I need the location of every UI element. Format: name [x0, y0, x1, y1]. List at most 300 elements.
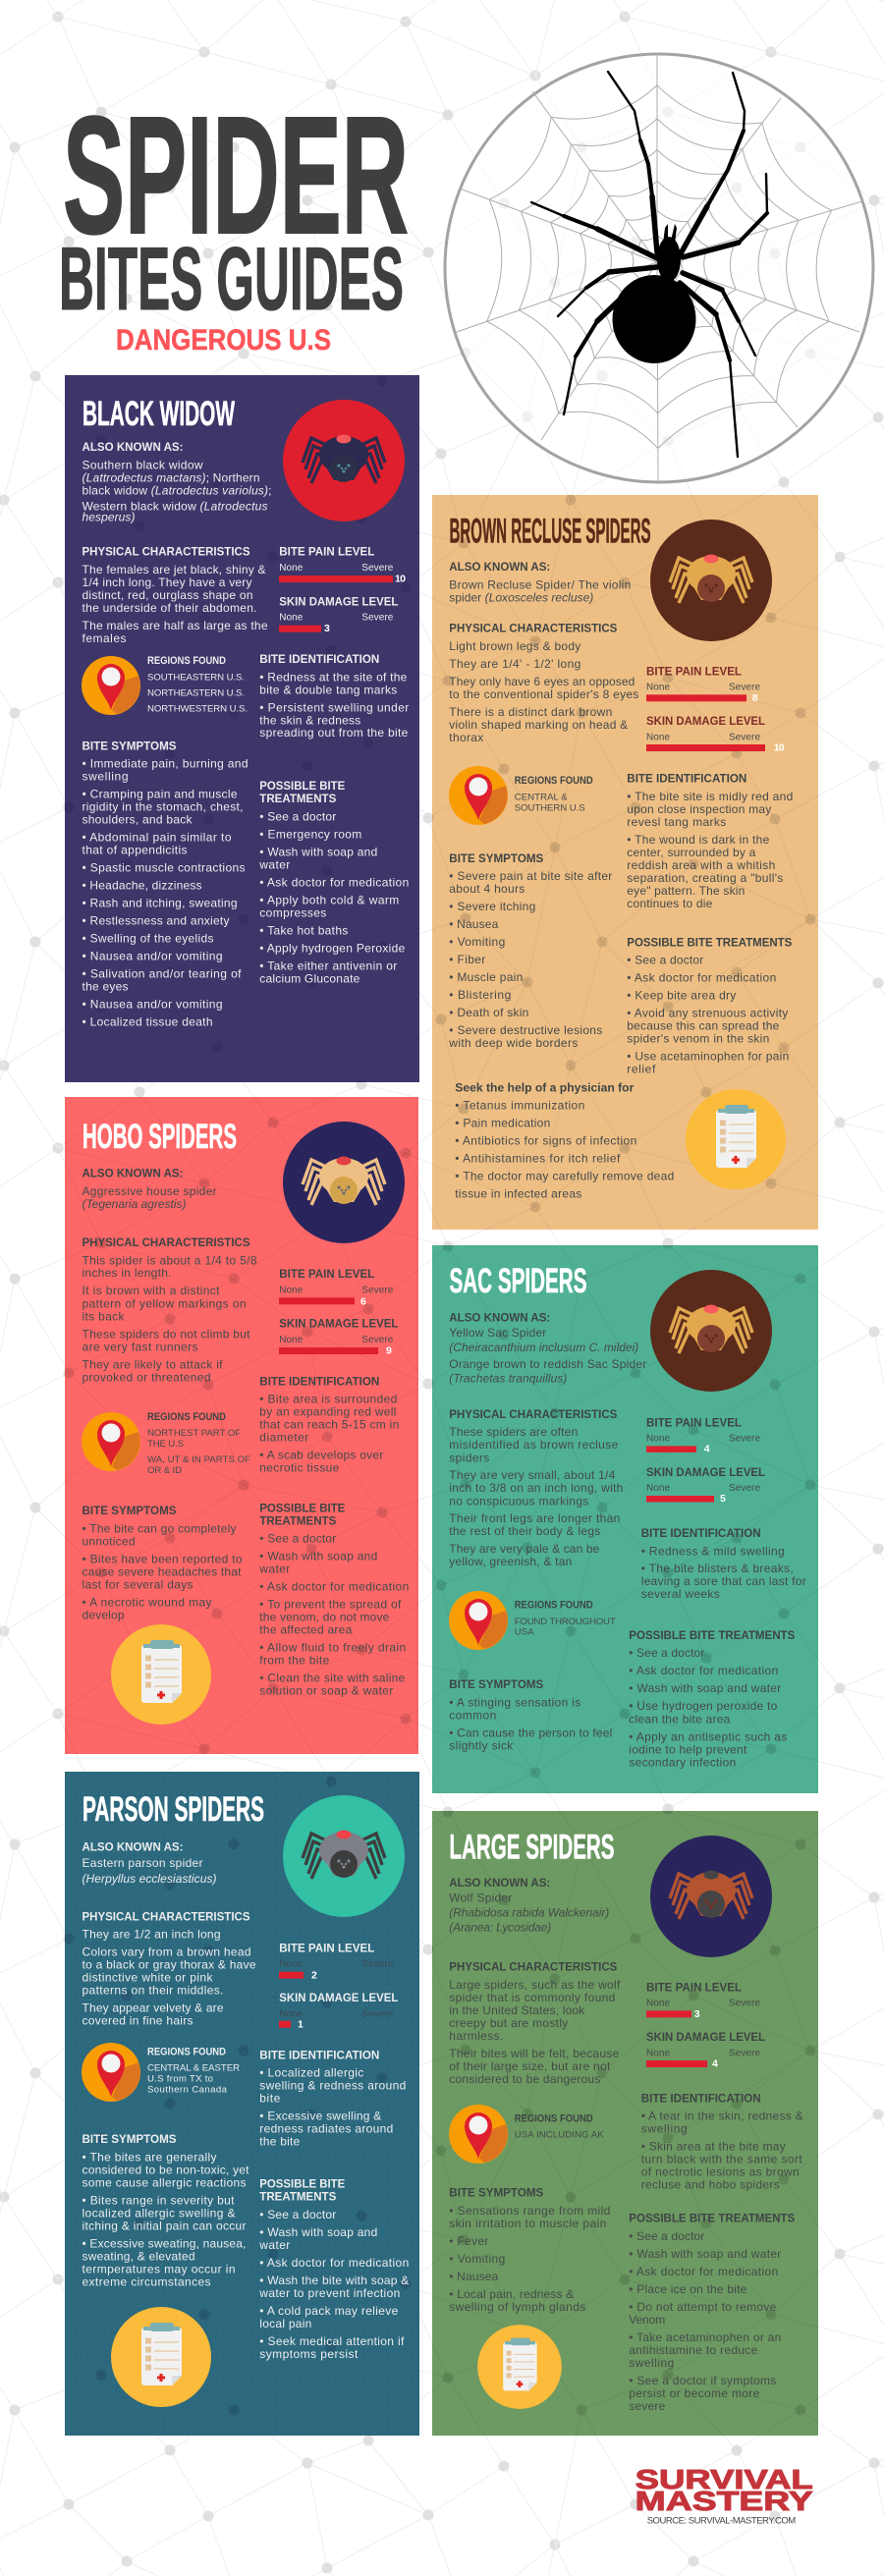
- text: bite identification: [627, 772, 793, 910]
- text: bite identification: • The bite site is midly red and: [627, 790, 793, 803]
- text: physical characteristics: PHYSICAL CHARACTERISTICS: [449, 622, 617, 635]
- chart: bite pain level 10: BITE PAIN LEVEL: [279, 545, 374, 559]
- text: regions found: REGIONS FOUND: [515, 2113, 593, 2125]
- chart: bite pain level 8: None: [646, 683, 670, 693]
- text: possible bite treatments: • Wash the bite with soap &: [259, 2274, 409, 2287]
- text: bite symptoms: • Nausea and/or vomiting: [83, 950, 222, 963]
- text: regions found: THE U.S: [147, 1439, 184, 1450]
- chart: skin damage level 9: Severe: [361, 1335, 394, 1345]
- text: possible bite treatments: water: [258, 1562, 290, 1576]
- text: possible bite treatments: calcium Gluconate: [259, 971, 360, 985]
- text: possible bite treatments: • Ask doctor for medication: [259, 875, 409, 889]
- text: possible bite treatments: • Wash with soap and: [259, 1550, 377, 1563]
- text: physical characteristics: spider that is commonly found: [449, 1991, 615, 2004]
- chart: bite pain level 10: 10: [395, 574, 406, 585]
- icon: location pin: [82, 1412, 140, 1471]
- text: physical characteristics: [83, 1909, 256, 2027]
- text: regions found: SOUTHEASTERN U.S.: [147, 673, 245, 684]
- text: physical characteristics: PHYSICAL CHARACTERISTICS: [83, 1235, 249, 1249]
- chart: bite pain level 2: [279, 1941, 394, 1981]
- text: possible bite treatments: POSSIBLE BITE TREATMENTS: [627, 936, 792, 950]
- chart: bite pain level 10: [279, 545, 406, 585]
- text: regions found: REGIONS FOUND: [147, 655, 226, 667]
- icon: hobo spider: [283, 1122, 405, 1243]
- text: bite symptoms: • Nausea: [449, 2270, 499, 2283]
- chart: bite pain level 2: Severe: [361, 1959, 394, 1970]
- text: bite symptoms: • A necrotic wound may: [83, 1595, 212, 1609]
- text: possible bite treatments: [258, 779, 409, 985]
- text: physical characteristics: covered in fine hairs: [83, 2013, 193, 2027]
- text: physical characteristics: the rest of their body & legs: [449, 1524, 600, 1538]
- logo: survival mastery: [635, 2464, 813, 2527]
- text: physical characteristics: PHYSICAL CHARACTERISTICS: [449, 1959, 617, 1973]
- chart: bite pain level 8: Severe: [729, 683, 760, 693]
- chart: bite pain level 6: BITE PAIN LEVEL: [279, 1267, 374, 1281]
- panel: hobo spiders: [65, 1097, 418, 1754]
- text: possible bite treatments: • Ask doctor for medication: [259, 2256, 409, 2270]
- text: bite symptoms: that of appendicitis: [83, 844, 187, 857]
- chart: bite pain level 4: BITE PAIN LEVEL: [646, 1415, 742, 1429]
- chart: skin damage level 1: 1: [298, 2018, 304, 2030]
- text: bite identification: [641, 1526, 806, 1601]
- text: bite identification: • Skin area at the bite may: [641, 2140, 786, 2154]
- logo: survival mastery: SOURCE: SURVIVAL-MASTERY.COM: [647, 2516, 796, 2527]
- text: bite symptoms: [83, 2132, 249, 2289]
- icon: location pin: [449, 1591, 508, 1650]
- text: bite identification: revesl tang marks: [627, 815, 726, 829]
- chart: skin damage level 10: None: [646, 732, 670, 742]
- text: bite identification: reddish area with a whitish: [627, 858, 775, 872]
- text: possible bite treatments: water: [258, 857, 290, 871]
- text: physical characteristics: [449, 1959, 621, 2086]
- text: bite identification: recluse and hobo spiders: [641, 2178, 780, 2192]
- icon: wolf spider: [650, 1836, 772, 1957]
- text: bite symptoms: termperatures may occur in: [83, 2263, 236, 2276]
- text: bite symptoms: • Vomiting: [449, 935, 505, 949]
- heading: parson spiders: PARSON SPIDERS: [83, 1790, 264, 1829]
- text: physical characteristics: The males are half as large as the: [83, 619, 268, 632]
- text: possible bite treatments: water: [258, 2238, 290, 2252]
- text: also known as: (Rhabidosa rabida Walckenair): [449, 1906, 609, 1920]
- text: regions found: [515, 1600, 616, 1638]
- text: possible bite treatments: TREATMENTS: [259, 1513, 336, 1527]
- text: possible bite treatments: • Take acetaminophen or an: [629, 2330, 781, 2344]
- chart: skin damage level 5: SKIN DAMAGE LEVEL: [646, 1465, 765, 1479]
- chart: bite pain level 2: None: [279, 1959, 304, 1970]
- text: physical characteristics: They only have 6 eyes an opposed: [449, 675, 635, 688]
- text: bite identification: swelling: [641, 2122, 688, 2136]
- text: possible bite treatments: • Apply both cold & warm: [259, 893, 399, 906]
- text: physical characteristics: PHYSICAL CHARACTERISTICS: [83, 1909, 249, 1923]
- text: physical characteristics: These spiders are often: [449, 1425, 578, 1439]
- heading: hobo spiders: HOBO SPIDERS: [83, 1118, 237, 1156]
- text: bite identification: turn black with the same sort: [641, 2153, 802, 2166]
- chart: skin damage level 9: 9: [386, 1344, 392, 1356]
- text: also known as: hesperus): [83, 511, 136, 524]
- text: bite symptoms: with deep wide borders: [448, 1036, 578, 1050]
- text: regions found: REGIONS FOUND: [515, 775, 593, 787]
- text: also known as: Southern black widow: [83, 459, 203, 472]
- chart: skin damage level 4: Severe: [729, 2048, 760, 2058]
- text: physical characteristics: spiders: [449, 1451, 489, 1464]
- text: possible bite treatments: • See a doctor: [629, 1646, 704, 1660]
- text: also known as: black widow (Latrodectus variolus);: [83, 484, 271, 498]
- chart: skin damage level 1: SKIN DAMAGE LEVEL: [279, 1991, 398, 2004]
- text: physical characteristics: [83, 1235, 257, 1384]
- text: possible bite treatments: • Take hot baths: [259, 923, 348, 937]
- text: regions found: [147, 655, 248, 715]
- text: possible bite treatments: • To prevent the spread of: [259, 1598, 402, 1612]
- text: bite symptoms: • Rash and itching, sweating: [83, 897, 238, 910]
- text: bite identification: center, surrounded by a: [627, 846, 756, 859]
- text: physical characteristics: 1/4 inch long. They have a very: [83, 575, 251, 589]
- text: regions found: SOUTHERN U.S: [515, 802, 585, 813]
- chart: bite pain level 4: 4: [704, 1443, 710, 1454]
- text: bite symptoms: • Immediate pain, burning and: [83, 757, 248, 771]
- text: physical characteristics: PHYSICAL CHARACTERISTICS: [83, 545, 249, 559]
- text: possible bite treatments: • Use hydrogen peroxide to: [629, 1699, 778, 1713]
- heading: black widow: BLACK WIDOW: [83, 395, 235, 433]
- chart: skin damage level 3: SKIN DAMAGE LEVEL: [279, 594, 398, 608]
- text: also known as: Aggressive house spider: [83, 1184, 216, 1198]
- text: physical characteristics: distinct, red, ourglass shape on: [83, 588, 253, 602]
- chart: bite pain level 6: None: [279, 1285, 304, 1295]
- text: seek the help of a physician: • Tetanus immunization: [455, 1099, 584, 1113]
- chart: skin damage level 4: [646, 2030, 765, 2070]
- text: also known as: Eastern parson spider: [83, 1856, 202, 1870]
- text: possible bite treatments: • Ask doctor for medication: [629, 2265, 778, 2278]
- text: possible bite treatments: • Keep bite area dry: [627, 989, 736, 1003]
- text: bite identification: leaving a sore that can last for: [641, 1574, 806, 1588]
- text: regions found: NORTHEST PART OF: [147, 1428, 241, 1439]
- text: regions found: WA, UT & IN PARTS OF: [147, 1454, 250, 1465]
- text: possible bite treatments: • Apply an antiseptic such as: [629, 1729, 787, 1743]
- logo: survival mastery: MASTERY: [635, 2486, 813, 2516]
- chart: bite pain level 3: 3: [694, 2008, 700, 2020]
- text: bite identification: upon close inspection may: [627, 802, 771, 816]
- text: also known as: (Tegenaria agrestis): [83, 1197, 187, 1211]
- text: bite identification: BITE IDENTIFICATION: [259, 652, 379, 666]
- text: physical characteristics: It is brown with a distinct: [83, 1284, 220, 1297]
- text: possible bite treatments: POSSIBLE BITE: [259, 2177, 345, 2191]
- text: bite symptoms: sweating, & elevated: [83, 2250, 194, 2264]
- text: possible bite treatments: • Do not attempt to remove: [629, 2300, 777, 2314]
- chart: skin damage level 9: None: [279, 1335, 304, 1345]
- text: bite symptoms: • Vomiting: [449, 2252, 505, 2266]
- chart: skin damage level 3: None: [279, 613, 304, 624]
- text: possible bite treatments: POSSIBLE BITE: [259, 779, 345, 793]
- text: seek the help of a physician: • Antibiotics for signs of infection: [455, 1134, 636, 1148]
- text: bite symptoms: the eyes: [83, 980, 128, 994]
- text: also known as: (Herpyllus ecclesiasticus): [83, 1872, 216, 1886]
- text: regions found: NORTHWESTERN U.S.: [147, 704, 248, 715]
- text: regions found: [515, 2113, 604, 2141]
- text: also known as: ALSO KNOWN AS:: [83, 440, 183, 454]
- text: bite identification: • Persistent swelling under: [259, 700, 409, 714]
- chart: bite pain level 3: BITE PAIN LEVEL: [646, 1980, 742, 1994]
- text: bite identification: • A scab develops over: [259, 1449, 383, 1462]
- text: also known as: (Trachetas tranquillus): [449, 1372, 567, 1386]
- title: BITES GUIDES: [59, 230, 404, 329]
- text: bite symptoms: about 4 hours: [449, 882, 525, 896]
- text: bite symptoms: • Headache, dizziness: [83, 879, 202, 893]
- text: regions found: CENTRAL & EASTER: [147, 2063, 240, 2074]
- heading: large spiders: LARGE SPIDERS: [450, 1828, 615, 1866]
- text: seek the help of a physician: • Antihistamines for itch relief: [455, 1152, 621, 1166]
- text: bite symptoms: cause severe headaches that: [83, 1564, 242, 1578]
- text: possible bite treatments: • Wash with soap and water: [629, 2247, 781, 2261]
- text: physical characteristics: They are 1/4' - 1/2' long: [449, 657, 580, 671]
- text: possible bite treatments: • Avoid any strenuous activity: [627, 1007, 788, 1020]
- text: possible bite treatments: the venom, do not move: [259, 1611, 390, 1624]
- chart: bite pain level 8: [646, 664, 760, 704]
- icon: location pin: [449, 766, 508, 825]
- text: physical characteristics: are very fast runners: [83, 1340, 198, 1353]
- text: bite identification: separation, creating a "bull's: [627, 871, 783, 885]
- text: bite identification: several weeks: [641, 1587, 720, 1601]
- text: possible bite treatments: • Ask doctor for medication: [259, 1580, 409, 1594]
- text: physical characteristics: patterns on their middles.: [83, 1983, 224, 1997]
- text: bite symptoms: BITE SYMPTOMS: [83, 1504, 177, 1517]
- panel: large spiders: [432, 1811, 818, 2436]
- text: bite symptoms: • Swelling of the eyelids: [83, 932, 214, 946]
- text: possible bite treatments: • Take either antivenin or: [259, 959, 397, 972]
- text: also known as: (Lattrodectus mactans); Northern: [83, 471, 259, 485]
- icon: medical clipboard: [686, 1089, 786, 1189]
- text: bite identification: by an expanding red well: [259, 1405, 396, 1419]
- panel: sac spiders: [432, 1245, 818, 1793]
- text: physical characteristics: Their front legs are longer than: [449, 1511, 620, 1525]
- text: bite symptoms: BITE SYMPTOMS: [83, 2132, 177, 2146]
- chart: bite pain level 6: Severe: [361, 1285, 394, 1295]
- text: bite identification: • A tear in the skin, redness &: [641, 2110, 803, 2123]
- text: regions found: NORTHEASTERN U.S.: [147, 688, 245, 699]
- chart: skin damage level 4: SKIN DAMAGE LEVEL: [646, 2030, 765, 2044]
- text: bite symptoms: swelling of lymph glands: [449, 2300, 585, 2314]
- text: bite identification: BITE IDENTIFICATION: [641, 1526, 761, 1540]
- text: bite identification: redness radiates around: [259, 2122, 393, 2136]
- chart: bite pain level 8: 8: [752, 692, 758, 704]
- chart: skin damage level 9: [279, 1317, 398, 1356]
- text: regions found: USA: [515, 1627, 534, 1638]
- text: bite symptoms: • Blistering: [449, 988, 511, 1002]
- text: bite symptoms: swelling: [83, 770, 128, 784]
- text: possible bite treatments: • See a doctor: [627, 954, 703, 967]
- text: bite symptoms: [83, 1504, 243, 1621]
- text: possible bite treatments: local pain: [259, 2317, 311, 2330]
- chart: skin damage level 5: [646, 1465, 765, 1505]
- text: possible bite treatments: • Seek medical attention if: [259, 2334, 405, 2348]
- text: possible bite treatments: POSSIBLE BITE TREATMENTS: [629, 1628, 795, 1642]
- text: bite identification: [259, 652, 409, 740]
- text: possible bite treatments: • Wash with soap and: [259, 845, 377, 858]
- text: physical characteristics: considered to be dangerous: [449, 2072, 600, 2086]
- text: bite symptoms: [83, 739, 248, 1029]
- text: bite symptoms: BITE SYMPTOMS: [449, 851, 543, 865]
- text: possible bite treatments: • Use acetaminophen for pain: [627, 1050, 789, 1064]
- text: physical characteristics: The females are jet black, shiny &: [83, 563, 265, 576]
- chart: bite pain level 6: [279, 1267, 394, 1307]
- text: possible bite treatments: solution or soap & water: [259, 1684, 393, 1698]
- text: bite symptoms: • Spastic muscle contractions: [83, 861, 246, 875]
- chart: skin damage level 4: None: [646, 2048, 670, 2058]
- text: physical characteristics: yellow, greenish, & tan: [449, 1555, 572, 1568]
- text: physical characteristics: Colors vary from a brown head: [83, 1945, 251, 1958]
- text: bite symptoms: [449, 2186, 610, 2314]
- chart: skin damage level 5: None: [646, 1483, 670, 1494]
- text: bite symptoms: [448, 851, 612, 1050]
- text: regions found: REGIONS FOUND: [515, 1600, 593, 1612]
- text: bite symptoms: • Excessive sweating, nausea,: [83, 2237, 246, 2251]
- text: possible bite treatments: POSSIBLE BITE TREATMENTS: [629, 2212, 795, 2225]
- spider on web illustration: [445, 54, 873, 482]
- text: physical characteristics: They are very small, about 1/4: [449, 1468, 616, 1482]
- text: also known as: (Aranea: Lycosidae): [449, 1921, 551, 1935]
- text: physical characteristics: [449, 622, 638, 744]
- chart: bite pain level 2: BITE PAIN LEVEL: [279, 1941, 374, 1954]
- text: bite symptoms: • Nausea: [449, 917, 499, 931]
- text: bite identification: [259, 1374, 399, 1475]
- text: physical characteristics: [83, 545, 268, 645]
- text: physical characteristics: They appear velvety & are: [83, 2001, 224, 2014]
- text: possible bite treatments: [629, 1628, 795, 1769]
- title: DANGEROUS U.S: [116, 324, 331, 356]
- text: possible bite treatments: symptoms persist: [259, 2347, 359, 2361]
- text: also known as: [83, 1840, 216, 1886]
- text: bite symptoms: slightly sick: [449, 1739, 514, 1753]
- text: bite symptoms: • Severe itching: [449, 900, 535, 913]
- chart: skin damage level 1: Severe: [361, 2008, 394, 2019]
- text: physical characteristics: There is a distinct dark brown: [449, 705, 612, 719]
- text: also known as: Orange brown to reddish Sac Spider: [449, 1357, 646, 1371]
- text: possible bite treatments: compresses: [259, 905, 326, 919]
- text: bite symptoms: localized allergic swelling &: [83, 2207, 236, 2220]
- text: physical characteristics: These spiders do not climb but: [83, 1327, 250, 1341]
- text: physical characteristics: PHYSICAL CHARACTERISTICS: [449, 1407, 617, 1421]
- chart: bite pain level 4: Severe: [729, 1434, 760, 1444]
- text: also known as: [83, 440, 271, 524]
- text: bite identification: BITE IDENTIFICATION: [641, 2091, 761, 2105]
- text: physical characteristics: pattern of yellow markings on: [83, 1296, 246, 1310]
- chart: skin damage level 3: [279, 594, 398, 634]
- text: bite symptoms: • Can cause the person to feel: [449, 1726, 612, 1740]
- text: physical characteristics: inch to 3/8 on an inch long, with: [449, 1481, 623, 1495]
- text: physical characteristics: Large spiders, such as the wolf: [449, 1978, 621, 1992]
- text: bite symptoms: some cause allergic reactions: [83, 2176, 246, 2190]
- chart: skin damage level 1: None: [279, 2008, 304, 2019]
- text: possible bite treatments: persist or become more: [629, 2386, 760, 2400]
- icon: location pin: [82, 656, 140, 715]
- text: possible bite treatments: relief: [627, 1063, 656, 1076]
- text: bite identification: [259, 2048, 406, 2149]
- text: bite symptoms: skin irritation to muscle pain: [449, 2217, 606, 2230]
- text: physical characteristics: to the conventional spider's 8 eyes: [449, 687, 638, 701]
- chart: bite pain level 10: None: [279, 563, 304, 574]
- text: bite identification: BITE IDENTIFICATION: [259, 2048, 379, 2061]
- title: [59, 82, 409, 356]
- text: possible bite treatments: antihistamine to reduce: [629, 2343, 758, 2357]
- text: physical characteristics: [449, 1407, 623, 1568]
- text: bite symptoms: common: [449, 1709, 496, 1723]
- text: regions found: OR & ID: [147, 1465, 182, 1476]
- text: possible bite treatments: [629, 2212, 795, 2413]
- icon: black widow spider: [283, 400, 405, 521]
- text: regions found: REGIONS FOUND: [147, 2046, 226, 2057]
- text: also known as: [449, 1310, 646, 1386]
- text: bite identification: necrotic tissue: [259, 1461, 340, 1475]
- text: possible bite treatments: Venom: [629, 2313, 665, 2327]
- text: possible bite treatments: [258, 1501, 409, 1698]
- text: seek the help of a physician: [455, 1081, 674, 1201]
- text: possible bite treatments: • Apply hydrogen Peroxide: [259, 941, 406, 955]
- text: bite identification: bite & double tang marks: [259, 683, 397, 696]
- text: bite symptoms: last for several days: [83, 1577, 193, 1591]
- text: bite identification: • Bite area is surrounded: [259, 1393, 397, 1406]
- text: possible bite treatments: • Allow fluid to freely drain: [259, 1641, 406, 1655]
- text: bite identification: the skin & redness: [259, 713, 360, 727]
- text: regions found: USA INCLUDING AK: [515, 2130, 604, 2141]
- text: bite identification: • Excessive swelling &: [259, 2110, 381, 2123]
- text: bite symptoms: • Abdominal pain similar to: [83, 831, 232, 845]
- text: possible bite treatments: • See a doctor: [259, 809, 336, 823]
- text: bite identification: continues to die: [627, 897, 713, 910]
- title: SPIDER: [63, 82, 409, 269]
- text: also known as: (Cheiracanthium inclusum C. mildei): [449, 1341, 638, 1354]
- chart: bite pain level 10: Severe: [361, 563, 394, 574]
- text: bite symptoms: • Cramping pain and muscle: [83, 788, 238, 801]
- text: regions found: [147, 2046, 240, 2096]
- icon: location pin: [449, 2105, 508, 2164]
- text: bite identification: • The bite blisters & breaks,: [641, 1562, 794, 1575]
- chart: skin damage level 5: Severe: [729, 1483, 760, 1494]
- text: possible bite treatments: from the bite: [259, 1654, 330, 1668]
- text: bite symptoms: • Localized tissue death: [83, 1015, 212, 1029]
- text: also known as: ALSO KNOWN AS:: [449, 1876, 550, 1890]
- text: physical characteristics: the underside of their abdomen.: [83, 601, 257, 615]
- text: bite identification: • Redness & mild swelling: [641, 1544, 785, 1558]
- text: bite symptoms: [449, 1677, 612, 1753]
- text: bite identification: BITE IDENTIFICATION: [259, 1374, 379, 1388]
- chart: bite pain level 3: None: [646, 1999, 670, 2009]
- text: bite identification: that can reach 5-15 cm in: [259, 1417, 399, 1431]
- text: regions found: [515, 775, 593, 813]
- icon: medical clipboard: [111, 2307, 211, 2407]
- text: bite symptoms: rigidity in the stomach, chest,: [83, 800, 244, 814]
- text: also known as: ALSO KNOWN AS:: [83, 1840, 183, 1854]
- text: physical characteristics: to a black or gray thorax & have: [83, 1957, 256, 1971]
- heading: sac spiders: SAC SPIDERS: [450, 1262, 587, 1300]
- text: bite identification: diameter: [259, 1431, 308, 1445]
- text: bite symptoms: • Fever: [449, 2234, 488, 2248]
- text: possible bite treatments: POSSIBLE BITE: [259, 1501, 345, 1514]
- text: bite identification: eye" pattern. The skin: [627, 884, 745, 898]
- text: bite symptoms: • The bite can go completely: [83, 1521, 236, 1535]
- text: also known as: [449, 560, 631, 604]
- text: possible bite treatments: • See a doctor: [629, 2229, 704, 2243]
- text: bite symptoms: unnoticed: [83, 1534, 136, 1548]
- text: physical characteristics: of their large size, but are not: [449, 2059, 611, 2073]
- text: possible bite treatments: TREATMENTS: [259, 2190, 336, 2204]
- chart: skin damage level 5: 5: [720, 1493, 726, 1505]
- text: physical characteristics: Their bites will be felt, because: [449, 2047, 620, 2060]
- text: possible bite treatments: • See a doctor: [259, 2208, 336, 2221]
- chart: bite pain level 6: 6: [360, 1295, 366, 1307]
- text: possible bite treatments: • Wash with soap and: [259, 2225, 377, 2239]
- panel: black widow: [65, 375, 419, 1082]
- text: physical characteristics: provoked or threatened: [83, 1370, 210, 1384]
- text: possible bite treatments: spider's venom in the skin: [627, 1032, 769, 1046]
- text: bite symptoms: • Local pain, redness &: [449, 2287, 574, 2301]
